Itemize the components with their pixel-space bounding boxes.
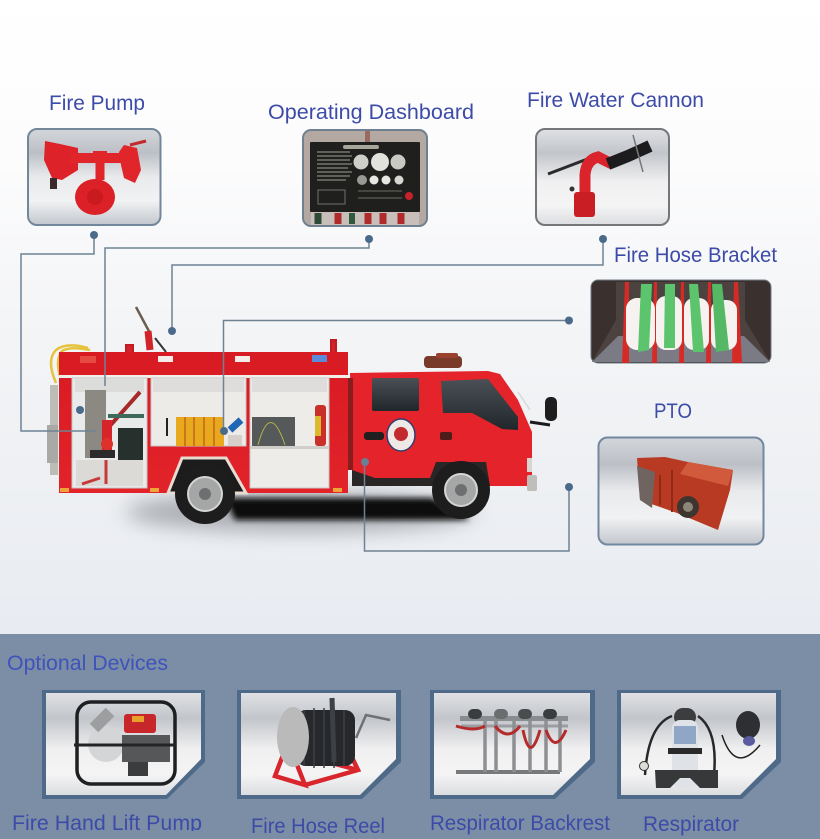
truck shadow: [125, 492, 475, 532]
heading: Operating Dashboard: Operating Dashboard: [268, 100, 474, 124]
truck: middle compartment: [151, 378, 246, 446]
truck: mirror: [530, 397, 557, 425]
heading: Optional Devices: Optional Devices: [7, 652, 168, 675]
icon: hose reel: [275, 698, 390, 785]
truck: door emblem: [387, 419, 415, 451]
icon: hose rolls: [592, 282, 770, 363]
card: Fire Pump: [28, 92, 160, 225]
heading: PTO: PTO: [654, 400, 692, 423]
icon: red fire pump: [44, 141, 146, 215]
device: Fire Hand Lift Pump: [12, 690, 205, 835]
icon: respirator backrest rack: [456, 709, 568, 774]
illustration: fire truck: [47, 307, 557, 524]
heading: Fire Water Cannon: Fire Water Cannon: [527, 89, 704, 112]
label: Respirator: Respirator: [643, 813, 739, 836]
truck: rear wheel arch: [168, 458, 246, 493]
icon: portable lift pump: [74, 702, 176, 784]
card: Operating Dashboard: [268, 100, 474, 226]
heading: Fire Pump: Fire Pump: [49, 92, 145, 115]
panel: Optional Devices: [0, 634, 820, 839]
heading: Fire Hose Bracket: Fire Hose Bracket: [614, 244, 777, 267]
connector: Operating Dashboard: [105, 235, 373, 386]
truck: front bumper: [527, 458, 537, 491]
device: Respirator: [617, 690, 781, 836]
truck: roof siren: [424, 353, 462, 368]
truck: rear body: [59, 352, 348, 493]
connector: Fire Pump: [21, 231, 98, 431]
device: Fire Hose Reel: [237, 690, 401, 838]
truck: left compartment: [72, 378, 147, 488]
icon: power take-off gearbox: [637, 457, 733, 530]
truck: water cannon on roof: [126, 307, 336, 352]
card: PTO: [598, 400, 764, 544]
truck: right compartment: [250, 378, 329, 488]
truck: front wheel: [432, 461, 490, 519]
icon: water cannon: [548, 135, 650, 217]
connector: Fire Water Cannon: [168, 235, 607, 335]
label: Fire Hand Lift Pump: Fire Hand Lift Pump: [12, 812, 202, 835]
device: Respirator Backrest: [430, 690, 610, 835]
icon: control panel: [310, 131, 420, 225]
card: Fire Water Cannon: [527, 89, 704, 225]
label: Respirator Backrest: Respirator Backrest: [430, 812, 610, 835]
truck: ladder: [47, 385, 58, 475]
label: Fire Hose Reel: Fire Hose Reel: [251, 815, 385, 838]
truck: yellow hose: [51, 345, 90, 383]
connector: PTO: [361, 458, 573, 551]
connector: Fire Hose Bracket: [220, 316, 573, 435]
page background: [0, 0, 820, 634]
truck: rear wheel: [175, 464, 235, 524]
card: Fire Hose Bracket: [591, 244, 777, 363]
icon: breathing apparatus: [640, 708, 760, 788]
truck: cab: [348, 371, 532, 486]
